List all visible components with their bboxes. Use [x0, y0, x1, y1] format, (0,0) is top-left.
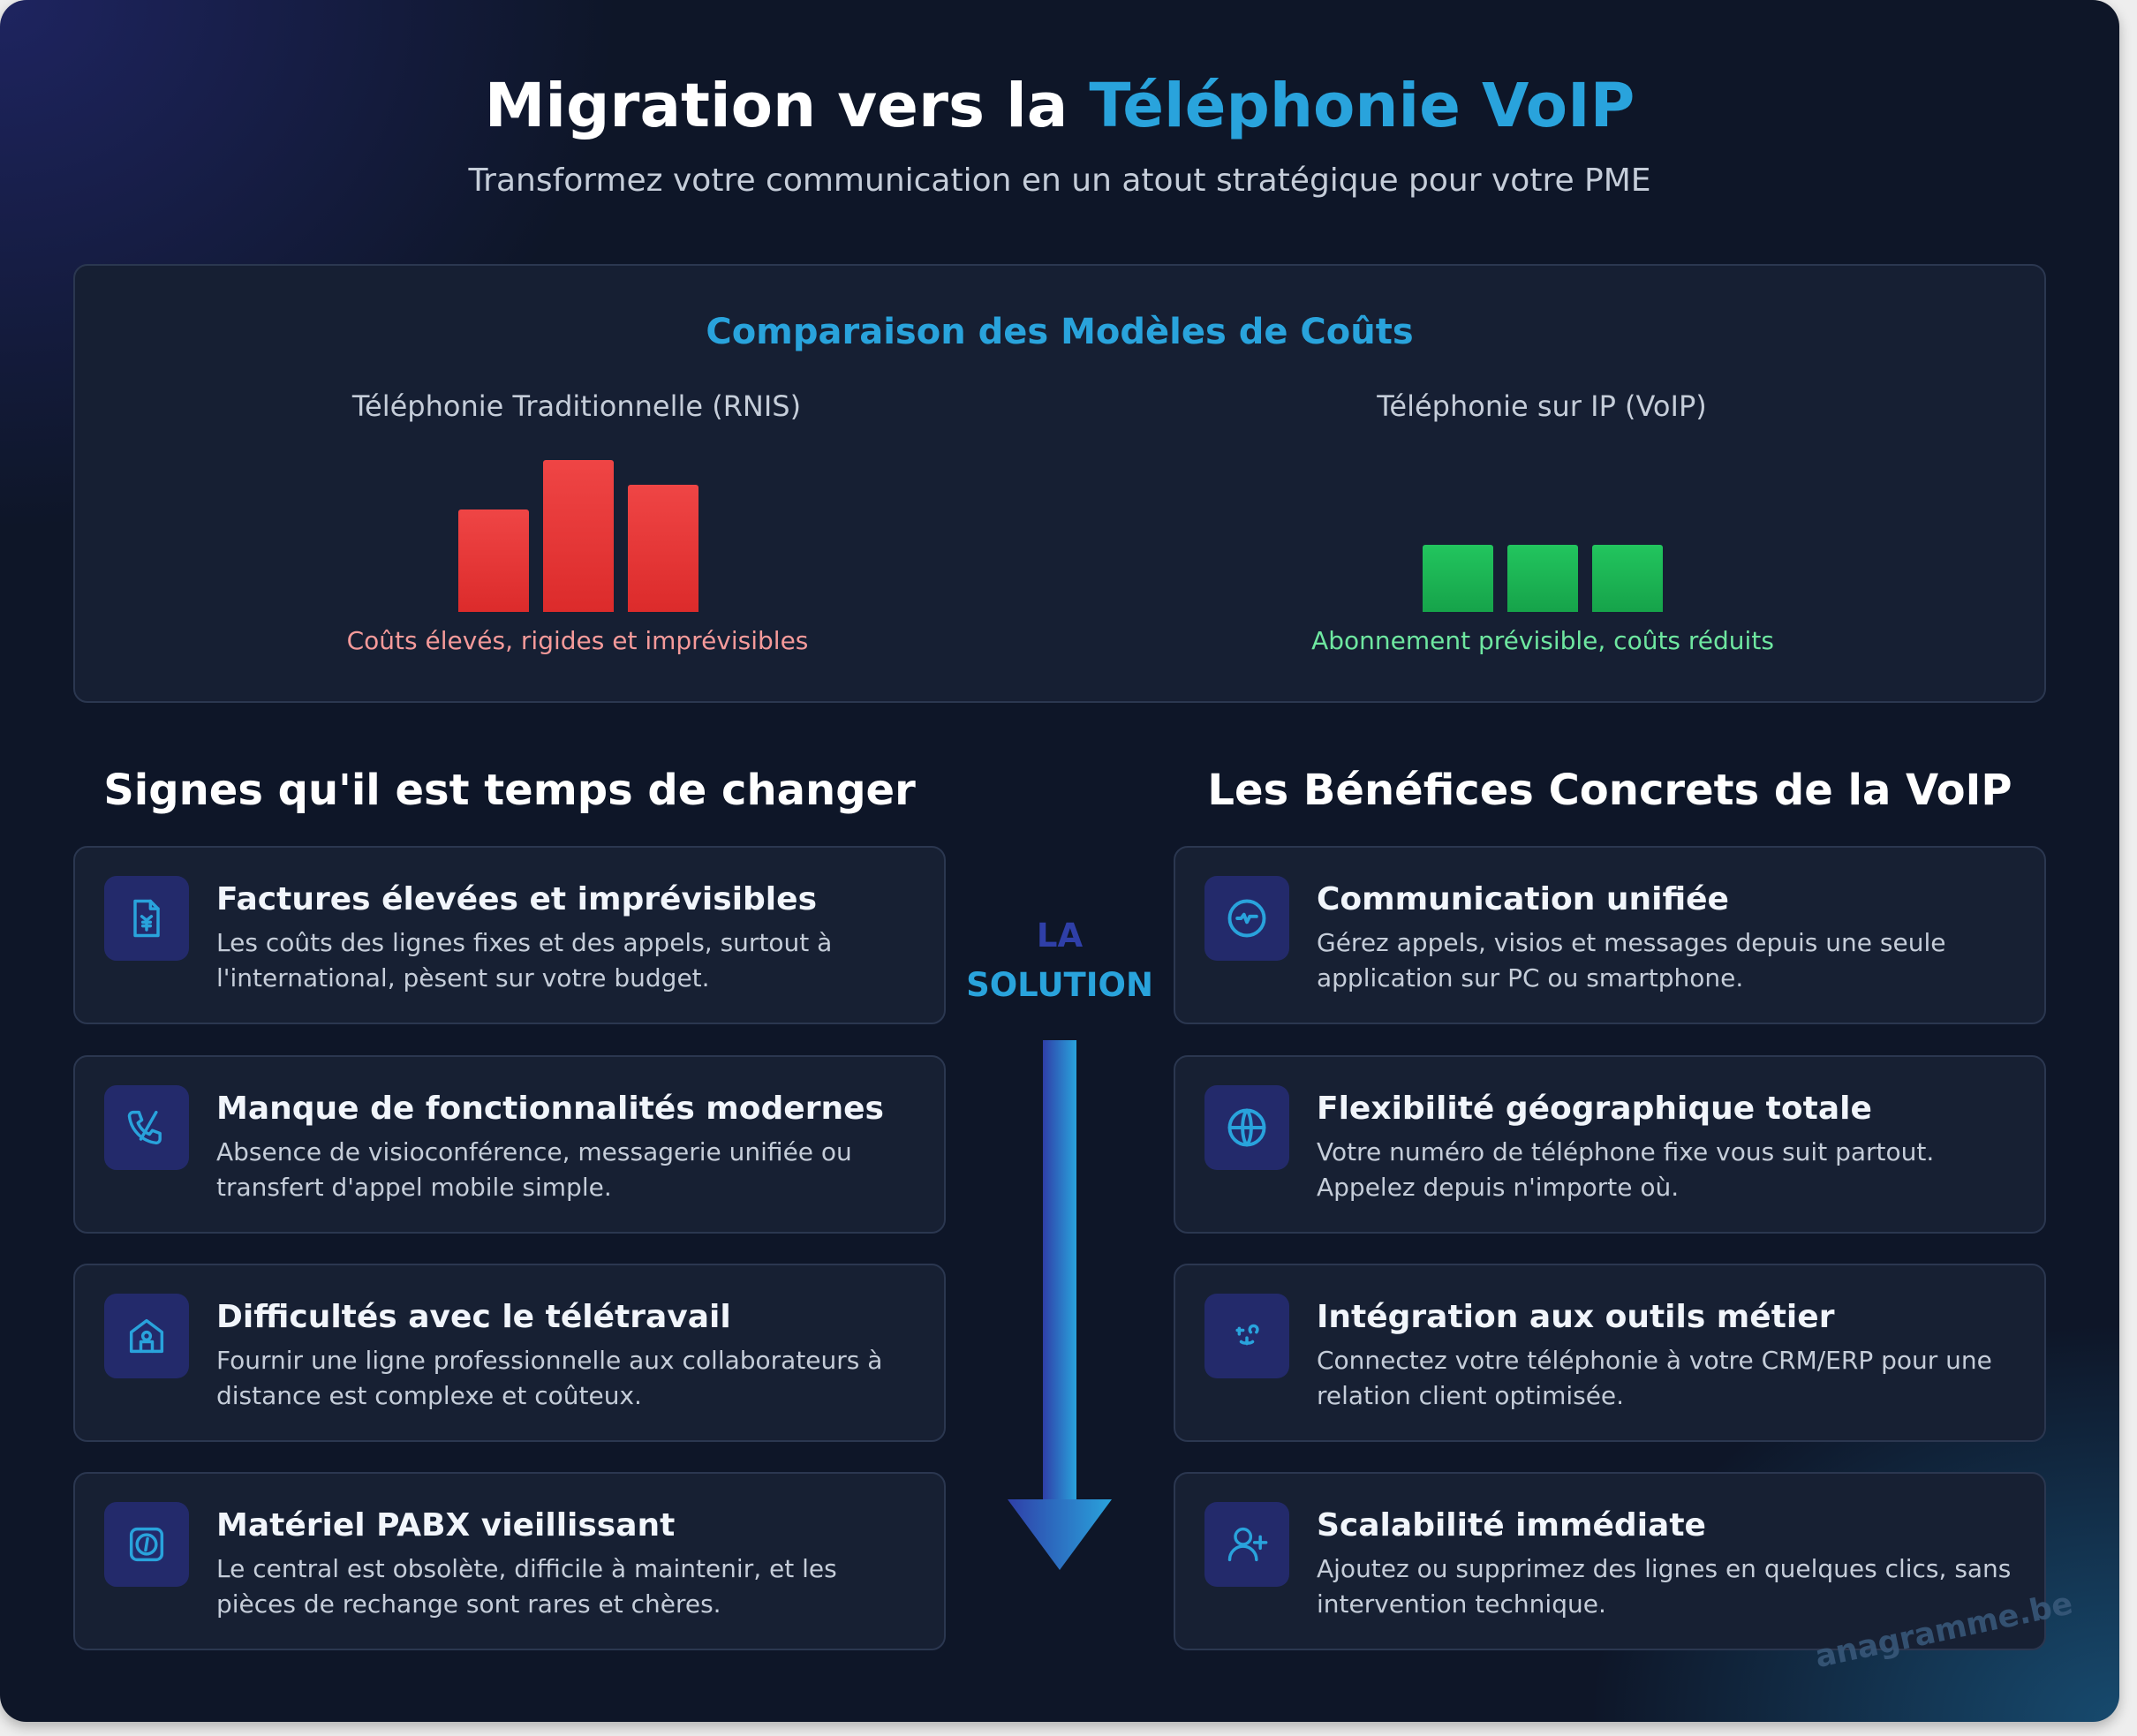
- card: communication: Communication unifiée: [1317, 881, 1729, 917]
- icon: device: [104, 1502, 189, 1587]
- card: integration: Intégration aux outils métier: [1317, 1299, 1834, 1335]
- card: flexibilite: Votre numéro de téléphone fixe vous suit partout. Appelez depuis n'importe où.: [1317, 1137, 1934, 1202]
- label: la solution: LA: [1037, 917, 1083, 955]
- watermark: anagramme.be: [1812, 1586, 2076, 1675]
- card: fonctionnalites: Manque de fonctionnalités modernes: [216, 1091, 884, 1127]
- caption: voip: Abonnement prévisible, coûts réduits: [1311, 626, 1774, 655]
- card: scalabilite: [1174, 1472, 2046, 1650]
- card: factures: [73, 846, 946, 1024]
- card: communication: [1174, 846, 2046, 1024]
- bar chart: traditional costs: [458, 460, 698, 612]
- arrow: down: [1008, 1040, 1112, 1570]
- icon: pulse circle: [1204, 876, 1289, 961]
- card: pabx: [73, 1472, 946, 1650]
- card: integration: [1174, 1264, 2046, 1442]
- card: pabx: Matériel PABX vieillissant: [216, 1507, 675, 1544]
- label: la solution: SOLUTION: [966, 966, 1153, 1004]
- card: teletravail: Difficultés avec le télétravail: [216, 1299, 731, 1335]
- card: teletravail: [73, 1264, 946, 1442]
- card: communication: Gérez appels, visios et messages depuis une seule application sur PC ou smartphone.: [1317, 928, 1945, 993]
- icon: integration: [1204, 1294, 1289, 1378]
- card: teletravail: Fournir une ligne professionnelle aux collaborateurs à distance est complexe et coûteux.: [216, 1346, 882, 1410]
- label: la solution: [966, 917, 1153, 1004]
- card: fonctionnalites: [73, 1055, 946, 1234]
- panel: cost comparison: [73, 264, 2046, 703]
- card: factures: Factures élevées et imprévisibles: [216, 881, 817, 917]
- heading: signs: Signes qu'il est temps de changer: [103, 766, 916, 815]
- icon: add user: [1204, 1502, 1289, 1587]
- caption: traditional: Coûts élevés, rigides et imprévisibles: [347, 626, 808, 655]
- title: Migration vers la Téléphonie VoIP: [485, 71, 1635, 141]
- icon: invoice: [104, 876, 189, 961]
- heading: benefits: Les Bénéfices Concrets de la VoIP: [1207, 766, 2012, 815]
- bar chart: voip costs: [1423, 545, 1663, 612]
- icon: home: [104, 1294, 189, 1378]
- card: pabx: Le central est obsolète, difficile à maintenir, et les pièces de rechange sont rares et chères.: [216, 1554, 837, 1619]
- icon: phone off: [104, 1085, 189, 1170]
- icon: globe: [1204, 1085, 1289, 1170]
- heading: voip: Téléphonie sur IP (VoIP): [1377, 389, 1707, 423]
- heading: traditional: Téléphonie Traditionnelle (RNIS): [352, 389, 801, 423]
- card: factures: Les coûts des lignes fixes et des appels, surtout à l'international, pèsent sur votre budget.: [216, 928, 832, 993]
- panel title: Comparaison des Modèles de Coûts: [706, 312, 1414, 352]
- subtitle: Transformez votre communication en un atout stratégique pour votre PME: [468, 162, 1651, 199]
- card: integration: Connectez votre téléphonie à votre CRM/ERP pour une relation client optimisée.: [1317, 1346, 1992, 1410]
- card: flexibilite: Flexibilité géographique totale: [1317, 1091, 1872, 1127]
- card: scalabilite: Scalabilité immédiate: [1317, 1507, 1706, 1544]
- card: fonctionnalites: Absence de visioconférence, messagerie unifiée ou transfert d'appel mobile simple.: [216, 1137, 852, 1202]
- card: flexibilite: [1174, 1055, 2046, 1234]
- card: scalabilite: Ajoutez ou supprimez des lignes en quelques clics, sans intervention technique.: [1317, 1554, 2011, 1619]
